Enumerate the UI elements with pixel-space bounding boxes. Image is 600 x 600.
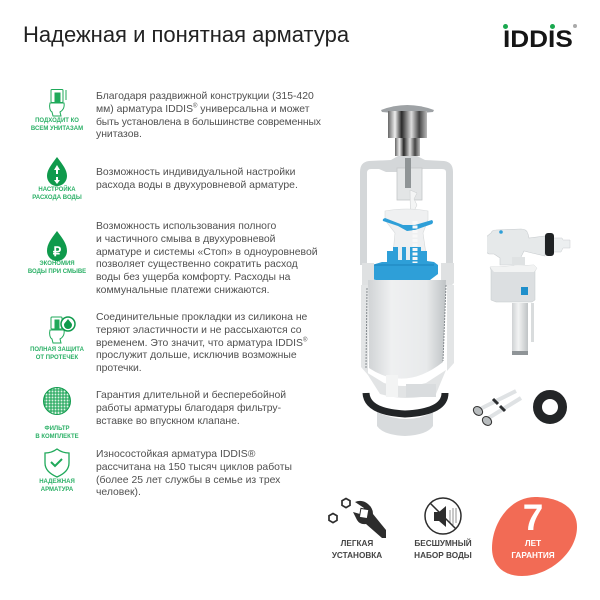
label: filter included: В КОМПЛЕКТЕ: [35, 434, 79, 440]
badge: 7 year warranty: ГАРАНТИЯ: [511, 550, 555, 560]
label: flow setting: РАСХОДА ВОДЫ: [32, 195, 82, 201]
text: flow adjustment: [96, 167, 298, 191]
badge: 7 year warranty: ЛЕТ: [525, 539, 541, 548]
label: reliable: АРМАТУРА: [41, 487, 73, 493]
label: silent fill: [414, 538, 472, 560]
label: silent fill: БЕСШУМНЫЙ: [414, 539, 472, 548]
label: leak protection: [30, 346, 84, 361]
text: filter insert: [96, 390, 286, 427]
text: durability: Износостойкая арматура IDDIS®: [96, 449, 255, 460]
label: fits all toilets: ПОДХОДИТ КО: [35, 118, 79, 124]
label: water saving: [28, 260, 86, 275]
product: fill valve: [487, 228, 570, 355]
text: silicone gaskets: теряют эластичности и не рассыхаются со: [96, 325, 302, 336]
label: reliable: НАДЕЖНАЯ: [39, 479, 75, 485]
text: silicone gaskets: прослужит дольше, исключив возможные: [96, 350, 297, 361]
badge: 7 year warranty: [492, 497, 577, 576]
product: buttons rods: [472, 390, 522, 426]
product: gasket ring: [533, 390, 567, 424]
text: filter insert: вставке во впускном клапане.: [96, 416, 240, 427]
label: fits all toilets: [31, 118, 83, 132]
text: flow adjustment: Возможность индивидуальной настройки: [96, 167, 295, 178]
label: leak protection: ОТ ПРОТЕЧЕК: [36, 355, 78, 361]
label: reliable: [39, 478, 75, 493]
icon: ruble drop: ₽: [53, 244, 62, 259]
label: water saving: ВОДЫ ПРИ СМЫВЕ: [28, 269, 86, 275]
label: flow setting: [32, 185, 82, 201]
text: durability: (более 25 лет службы в семье из трех: [96, 475, 280, 486]
label: leak protection: ПОЛНАЯ ЗАЩИТА: [30, 347, 84, 353]
text: filter insert: Гарантия длительной и бесперебойной: [96, 390, 286, 401]
icon: shield: [44, 448, 70, 478]
text: filter insert: работы арматуры благодаря фильтру-: [96, 403, 281, 414]
text: durability: рассчитана на 150 тысяч циклов работы: [96, 462, 292, 473]
title: Надежная и понятная арматура: [23, 22, 349, 47]
text: telescopic design: [96, 91, 321, 140]
text: silicone gaskets: [96, 312, 308, 374]
text: durability: человек).: [96, 487, 141, 498]
text: flush modes: и частичного смыва в двухуровневой: [96, 234, 276, 245]
label: easy install: [332, 539, 382, 560]
text: durability: [96, 449, 292, 498]
label: easy install: УСТАНОВКА: [332, 550, 382, 560]
logo: IDDIS: IDDIS: [503, 26, 573, 53]
label: filter included: ФИЛЬТР: [44, 426, 70, 432]
icon: toilet: [49, 89, 66, 116]
label: easy install: ЛЕГКАЯ: [341, 539, 373, 548]
text: telescopic design: быть установлена в большинстве современных: [96, 117, 321, 128]
text: silicone gaskets: протечки.: [96, 363, 142, 374]
text: flush modes: арматуре и системы «Стоп» в одноуровневой: [96, 247, 318, 258]
text: flush modes: позволяет существенно сократить расход: [96, 259, 298, 270]
text: flush modes: Возможность использования полного: [96, 221, 276, 232]
label: silent fill: НАБОР ВОДЫ: [414, 550, 472, 560]
label: fits all toilets: ВСЕМ УНИТАЗАМ: [31, 126, 83, 132]
badge: 7 year warranty: 7: [523, 497, 543, 538]
icon: filter: [43, 387, 71, 415]
label: filter included: [35, 426, 79, 440]
text: telescopic design: унитазов.: [96, 129, 142, 140]
text: flush modes: воды без ущерба комфорту. Расходы на: [96, 272, 290, 283]
icon: ruble drop: [47, 231, 67, 261]
text: flow adjustment: расхода воды в двухуровневой арматуре.: [96, 180, 298, 191]
icon: adjustment drop: [47, 157, 67, 186]
text: telescopic design: Благодаря раздвижной конструкции (315-420: [96, 91, 314, 102]
icon: leak protection: [49, 316, 76, 344]
text: silicone gaskets: Соединительные прокладки из силикона не: [96, 312, 307, 323]
label: flow setting: НАСТРОЙКА: [38, 187, 76, 193]
text: silicone gaskets: временем. Это значит, что арматура IDDIS®: [96, 337, 307, 349]
text: flush modes: коммунальные платежи снижаются.: [96, 285, 269, 296]
label: water saving: ЭКОНОМИЯ: [39, 261, 75, 267]
icon: silent: [424, 497, 462, 535]
icon: wrench and nuts: [328, 498, 386, 538]
text: telescopic design: мм) арматура IDDIS® универсальна и может: [96, 103, 310, 115]
text: flush modes: [96, 221, 318, 296]
product: flush valve: [360, 105, 454, 436]
